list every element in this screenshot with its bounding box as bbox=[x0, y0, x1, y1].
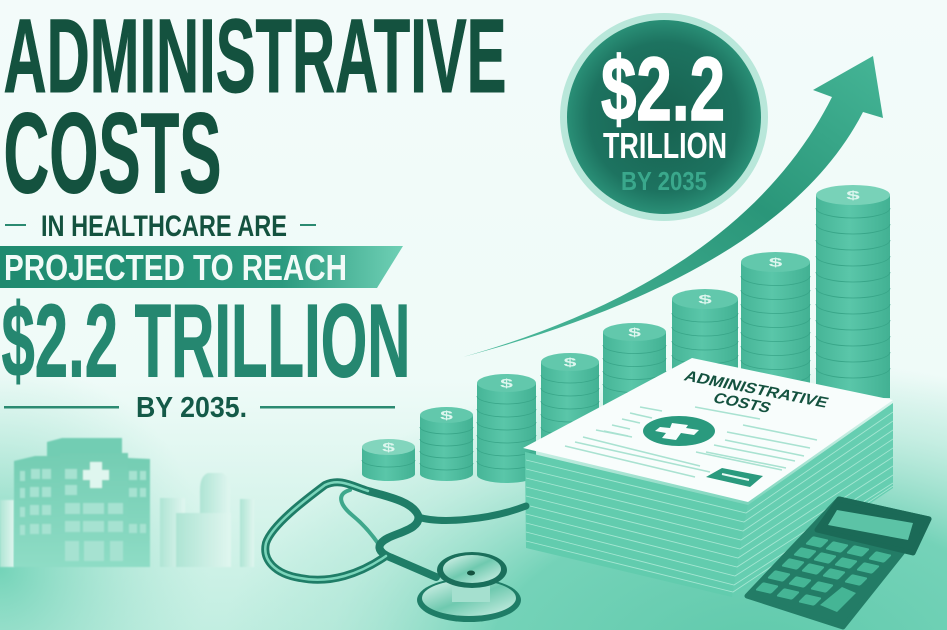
badge: $2.2 trillion by 2035: BY 2035 bbox=[621, 166, 707, 196]
title: Administrative Costs: COSTS bbox=[4, 90, 221, 218]
growth arrow bbox=[463, 56, 883, 357]
coin stack 7 bbox=[741, 252, 810, 405]
badge: $2.2 trillion by 2035: $2.2 bbox=[601, 40, 725, 140]
chest piece bbox=[417, 552, 521, 622]
coin stack 2: $ bbox=[440, 409, 453, 422]
stethoscope bbox=[265, 482, 526, 622]
hospital windows bbox=[20, 469, 146, 561]
tube to the right bbox=[418, 506, 526, 520]
coin stack 6 bbox=[672, 289, 738, 400]
paper edges bbox=[526, 412, 893, 592]
title: Administrative Costs: ADMINISTRATIVE bbox=[4, 0, 506, 115]
document stack bbox=[523, 358, 893, 597]
calculator screen bbox=[828, 510, 913, 540]
headline figure: $2.2 trillion: $2.2 TRILLION bbox=[2, 284, 411, 400]
hospital building bbox=[14, 438, 150, 567]
banner: projected to reach: PROJECTED TO REACH bbox=[4, 247, 347, 288]
coin stack 2 bbox=[420, 407, 473, 481]
coin stack 3 bbox=[477, 374, 536, 483]
outer loop tube bbox=[265, 482, 436, 580]
coin stack 3: $ bbox=[500, 377, 513, 390]
calculator keys bbox=[755, 536, 892, 612]
coin stack 5: $ bbox=[628, 326, 641, 339]
coin stack 6: $ bbox=[698, 293, 712, 307]
badge: $2.2 trillion by 2035 bbox=[560, 13, 768, 221]
badge: $2.2 trillion by 2035: TRILLION bbox=[603, 125, 727, 166]
coin stack 8 bbox=[816, 185, 890, 398]
coin stack 1 bbox=[362, 439, 415, 481]
icon: medical cross bbox=[643, 416, 715, 446]
coin stack 5 bbox=[603, 323, 666, 420]
coin stack 1: $ bbox=[382, 441, 395, 454]
subheading: in healthcare are: IN HEALTHCARE ARE bbox=[41, 210, 287, 243]
document title: COSTS bbox=[710, 390, 774, 417]
title: Administrative Costs bbox=[4, 0, 506, 218]
by 2035 line: BY 2035. bbox=[136, 392, 247, 424]
coin stack 4: $ bbox=[564, 356, 576, 369]
calculator bbox=[747, 499, 929, 627]
top sheet bbox=[523, 358, 893, 502]
coin stack 4 bbox=[541, 353, 599, 450]
document text lines bbox=[565, 407, 817, 477]
icon: hospital cross bbox=[83, 462, 109, 488]
icon: document stamp bbox=[706, 468, 763, 487]
coin stack 8: $ bbox=[846, 189, 860, 203]
coin stack 7: $ bbox=[769, 256, 783, 270]
inner binaural tube bbox=[341, 490, 386, 556]
city skyline bbox=[0, 473, 254, 567]
document title: ADMINISTRATIVE bbox=[681, 368, 831, 411]
